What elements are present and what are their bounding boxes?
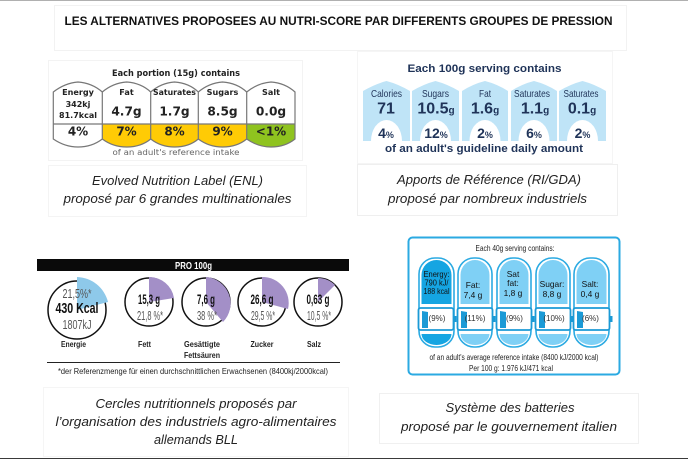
circle: Zucker: [238, 277, 289, 349]
ENL values: [59, 87, 286, 138]
battery gauges: (10%): [543, 314, 565, 323]
battery values: 790 kJ/: [424, 278, 449, 288]
RI values: [371, 88, 598, 141]
BLL footnote: *der Referenzmenge für einen durchschnittlichen Erwachsenen (8400kj/2000kcal): [58, 366, 328, 376]
circle: Salz: Salz: [307, 339, 321, 349]
circle: Gesättigte Fettsäuren: 38 %*: [197, 309, 217, 323]
panel: BLL nutrition circles: [37, 259, 349, 376]
caption: RI/GDA: proposé par nombreux industriels: [387, 191, 588, 206]
RI values: 1.6g: [471, 100, 499, 118]
circle: Energie: 430 Kcal: [56, 300, 98, 317]
circle: Energie: Energie: [61, 339, 86, 349]
battery heading: Each 40g serving contains:: [476, 243, 554, 253]
circle: Fett: 21,8 %*: [137, 309, 163, 323]
ENL values: Energy: [62, 87, 95, 97]
circle: Energie: 1807kJ: [62, 317, 92, 332]
RI tabs: [363, 81, 606, 141]
caption: batteries: [380, 394, 638, 444]
RI values: 6%: [526, 125, 542, 141]
battery values: Salt:: [582, 279, 598, 289]
battery values: 8,8 g: [543, 289, 562, 299]
circle: Energie: [48, 277, 108, 349]
ENL values: Saturates: [153, 88, 196, 97]
caption: RI/GDA: Apports de Référence (RI/GDA): [396, 172, 581, 187]
ENL values: 4.7g: [111, 104, 142, 118]
RI values: 2%: [477, 125, 493, 141]
circle: Zucker: 29,5 %*: [251, 309, 275, 323]
battery values: 1,8 g: [504, 288, 523, 298]
RI footnote: of an adult's guideline daily amount: [385, 143, 583, 155]
caption: ENL: [48, 166, 306, 216]
battery values: Sugar:: [540, 279, 564, 289]
battery footnote: of an adult's average reference intake (8400 kJ/2000 kcal): [430, 352, 599, 362]
ENL values: 4%: [68, 124, 88, 138]
RI values: 12%: [424, 125, 448, 141]
caption: RI/GDA: [358, 164, 618, 216]
ENL column outlines: [53, 82, 295, 147]
caption: BLL: Cercles nutritionnels proposés par: [96, 396, 297, 411]
battery values: Fat:: [466, 280, 480, 290]
RI values: Sugars: [422, 88, 449, 100]
RI values: 1.1g: [521, 100, 549, 118]
circle: Gesättigte Fettsäuren: Fettsäuren: [184, 350, 220, 360]
circle: Salz: 0,63 g: [306, 291, 330, 307]
circle: Zucker: Zucker: [250, 339, 274, 349]
caption: BLL: [44, 388, 348, 456]
battery values: [424, 269, 600, 300]
ENL values: 8.5g: [207, 104, 238, 118]
RI values: Saturates: [514, 88, 550, 100]
BLL black header: [37, 259, 349, 272]
circle: Energie: 21,5%*: [62, 286, 92, 301]
RI values: 4%: [378, 125, 394, 141]
RI values: Saturates: [564, 88, 598, 100]
ENL values: 9%: [212, 124, 233, 138]
caption: ENL: proposé par 6 grandes multinationales: [62, 191, 292, 206]
ENL heading: Each portion (15g) contains: [112, 69, 240, 79]
circle: Gesättigte Fettsäuren: [182, 277, 231, 360]
battery values: 0,4 g: [581, 289, 600, 299]
title: LES ALTERNATIVES PROPOSEES AU NUTRI-SCORE PAR DIFFERENTS GROUPES DE PRESSION: [64, 14, 613, 28]
circle: Salz: 10,5 %*: [307, 309, 331, 323]
ENL values: 8%: [164, 124, 185, 138]
ENL values: <1%: [256, 124, 286, 138]
RI values: 71: [377, 100, 395, 118]
caption: batteries: proposé par le gouvernement italien: [400, 419, 617, 434]
RI white percent domes: [371, 120, 598, 141]
circle: Fett: [125, 277, 174, 349]
RI values: 10.5g: [417, 100, 455, 118]
caption: BLL: allemands BLL: [154, 432, 238, 447]
ENL values: 1.7g: [159, 104, 190, 118]
panel: Reference Intakes: [358, 52, 612, 164]
ENL values: Salt: [262, 87, 280, 97]
battery values: fat:: [507, 278, 519, 288]
circle: Salz: [294, 278, 342, 349]
battery gauges: [418, 308, 612, 330]
caption: ENL: Evolved Nutrition Label (ENL): [92, 173, 263, 188]
BLL black header: PRO 100g: [175, 261, 212, 272]
panel: battery system: Per 100 g: 1.976 kJ/471 kcal: [469, 363, 553, 373]
battery values: Energy:: [424, 269, 450, 279]
circle: Fett: 15,3 g: [138, 291, 160, 307]
ENL values: Sugars: [207, 87, 239, 97]
ENL colored percent bands: [102, 124, 295, 147]
ENL values: 81.7kcal: [59, 111, 97, 120]
circle: Zucker: 26,6 g: [250, 291, 274, 307]
panel: battery system: [408, 238, 620, 374]
ENL values: Fat: [119, 87, 134, 97]
title: [54, 6, 626, 50]
battery values: 188 kcal: [424, 286, 450, 296]
battery gauges: (9%): [429, 314, 446, 323]
battery gauges: (9%): [506, 314, 523, 323]
RI values: Fat: [479, 88, 491, 100]
RI values: Calories: [371, 88, 402, 100]
battery values: Sat: [507, 269, 520, 279]
ENL values: 342kj: [66, 100, 91, 109]
RI values: 0.1g: [568, 100, 596, 118]
ENL footnote: of an adult's reference intake: [112, 148, 240, 157]
battery values: 7,4 g: [464, 290, 483, 300]
circle: Gesättigte Fettsäuren: 7,6 g: [197, 291, 215, 307]
battery gauges: (6%): [582, 314, 599, 323]
battery gauges: (11%): [465, 314, 486, 323]
ENL values: 0.0g: [256, 104, 286, 118]
caption: batteries: Système des batteries: [446, 400, 575, 415]
battery columns: [419, 258, 609, 347]
ENL values: 7%: [116, 124, 137, 138]
RI values: 2%: [575, 125, 590, 141]
circle: Gesättigte Fettsäuren: Gesättigte: [184, 339, 220, 349]
panel: Evolved Nutrition Label: [48, 60, 302, 160]
RI heading: Each 100g serving contains: [408, 63, 562, 75]
circle: Fett: Fett: [138, 339, 151, 349]
caption: BLL: l’organisation des industriels agro-alimentaires: [56, 414, 337, 429]
